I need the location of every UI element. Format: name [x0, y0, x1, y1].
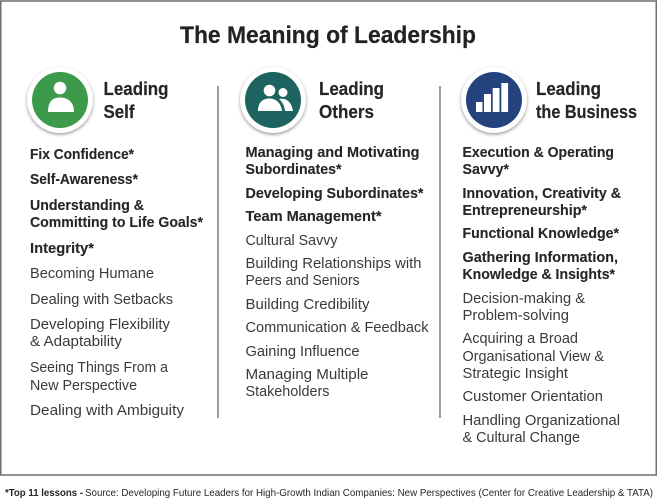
list: leading others lessons: Building Credibility [246, 296, 370, 313]
list: leading self lessons: Becoming Humane [30, 265, 154, 282]
list: leading others lessons: Managing Multiple [246, 366, 368, 383]
icon: person in green circle [27, 67, 93, 134]
list: leading self lessons: Seeing Things From a [30, 359, 169, 376]
heading: leading the business: Leading [536, 78, 601, 99]
list: leading the business lessons: Organisational View & [462, 348, 604, 365]
list: leading self lessons: Developing Flexibility [30, 316, 170, 333]
list: leading others lessons [246, 144, 429, 400]
list: leading self lessons: Self-Awareness* [30, 171, 138, 188]
list: leading self lessons: Fix Confidence* [30, 146, 134, 163]
heading: leading self [104, 78, 168, 122]
list: leading the business lessons: Gathering Information, [462, 249, 618, 266]
list: leading the business lessons: Decision-making & [462, 290, 585, 307]
icon: bar chart in navy circle [461, 67, 527, 134]
list: leading self lessons: & Adaptability [30, 333, 122, 350]
list: leading others lessons: Building Relationships with [246, 255, 422, 272]
list: leading the business lessons: Functional Knowledge* [462, 225, 619, 242]
list: leading self lessons: Dealing with Setbacks [30, 291, 173, 308]
heading: leading others: Leading [319, 78, 384, 99]
list: leading others lessons: Cultural Savvy [246, 232, 338, 249]
list: leading the business lessons: Strategic Insight [462, 365, 569, 382]
list: leading the business lessons: Problem-solving [462, 307, 569, 324]
list: leading the business lessons: Knowledge & Insights* [462, 266, 615, 283]
list: leading the business lessons: Handling Organizational [462, 412, 620, 429]
list: leading the business lessons: Savvy* [462, 161, 509, 178]
heading: leading self: Self [104, 101, 135, 122]
footnote: *Top 11 lessons - [5, 487, 83, 499]
list: leading self lessons: Understanding & [30, 197, 144, 214]
heading: leading the business: the Business [536, 101, 637, 122]
panel: leading others [240, 67, 429, 400]
icon: two people in teal circle [240, 67, 306, 134]
list: leading others lessons: Peers and Seniors [246, 272, 360, 289]
list: leading the business lessons [462, 144, 621, 446]
list: leading self lessons: Dealing with Ambiguity [30, 402, 184, 419]
heading: leading others [319, 78, 384, 122]
list: leading the business lessons: Acquiring a Broad [462, 330, 578, 347]
title: The Meaning of Leadership [180, 22, 476, 49]
list: leading others lessons: Team Management* [246, 208, 382, 225]
list: leading others lessons: Gaining Influence [246, 343, 360, 360]
heading: leading others: Others [319, 101, 374, 122]
list: leading the business lessons: & Cultural Change [462, 429, 580, 446]
list: leading self lessons [30, 146, 203, 419]
list: leading the business lessons: Entrepreneurship* [462, 202, 587, 219]
panel: leading the business [461, 67, 637, 446]
list: leading others lessons: Subordinates* [246, 161, 342, 178]
list: leading self lessons: Committing to Life Goals* [30, 214, 203, 231]
heading: leading self: Leading [104, 78, 168, 99]
list: leading self lessons: New Perspective [30, 377, 137, 394]
list: leading the business lessons: Customer Orientation [462, 388, 603, 405]
panel: leading self [27, 67, 203, 419]
list: leading the business lessons: Execution & Operating [462, 144, 614, 161]
list: leading self lessons: Integrity* [30, 240, 94, 257]
list: leading others lessons: Stakeholders [246, 383, 330, 400]
list: leading the business lessons: Innovation, Creativity & [462, 185, 621, 202]
list: leading others lessons: Developing Subordinates* [246, 185, 424, 202]
list: leading others lessons: Managing and Motivating [246, 144, 420, 161]
heading: leading the business [536, 78, 637, 122]
list: leading others lessons: Communication & Feedback [246, 319, 429, 336]
